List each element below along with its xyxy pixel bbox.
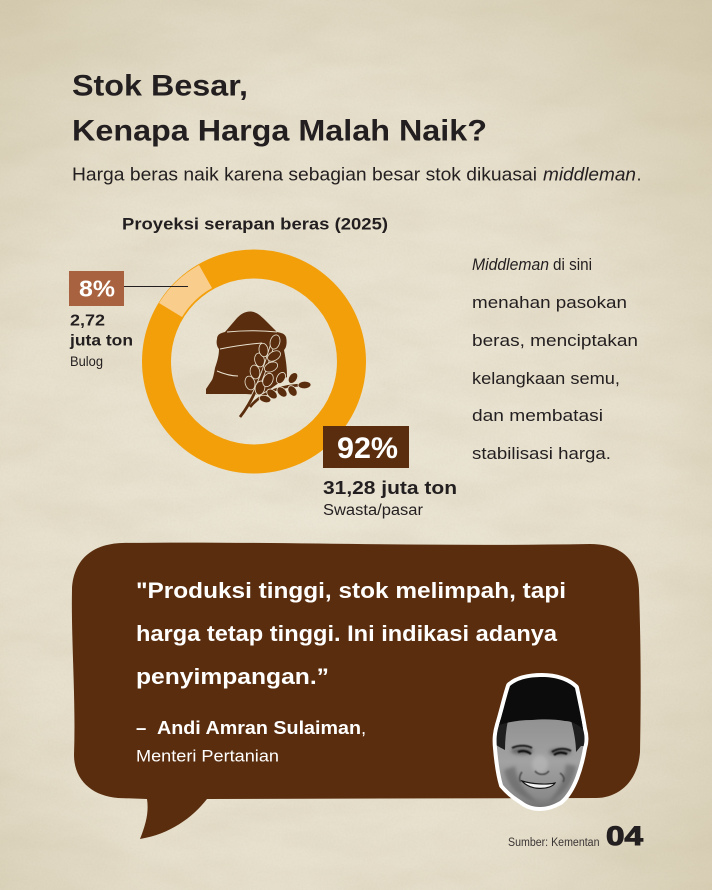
quote text: harga tetap tinggi. Ini indikasi adanya [136, 621, 558, 646]
swasta value: 31,28 juta ton [323, 478, 457, 498]
explanation text: Middleman [472, 256, 549, 274]
quote text: "Produksi tinggi, stok melimpah, tapi [136, 578, 566, 603]
callout: 8% Bulog [69, 271, 188, 369]
subtitle: Harga beras naik karena sebagian besar stok dikuasai [72, 164, 537, 184]
explanation text: kelangkaan semu, [472, 370, 620, 388]
title [72, 70, 487, 148]
callout: 8% Bulog: 8% [79, 276, 115, 302]
callout: 8% Bulog: juta ton [69, 332, 133, 350]
label box 92% [323, 426, 409, 468]
callout: 92% Swasta/pasar: Swasta/pasar [323, 502, 423, 519]
explanation text [472, 256, 638, 463]
face [496, 712, 584, 807]
attribution: – [136, 717, 146, 738]
quote text: penyimpangan.” [136, 664, 329, 689]
quote text [136, 578, 566, 689]
smile [522, 781, 555, 788]
head contents [496, 677, 584, 807]
page number: 04 [606, 821, 643, 851]
face shading [504, 748, 576, 802]
explanation text: menahan pasokan [472, 294, 627, 312]
attribution: , [361, 717, 366, 738]
white sticker outline [497, 677, 584, 807]
callout: 8% Bulog: Bulog [70, 354, 103, 369]
chart heading: Proyeksi serapan beras (2025) [122, 214, 388, 234]
speech bubble [72, 543, 641, 839]
source: Sumber: Kementan [508, 837, 600, 849]
peci hat [499, 677, 583, 729]
hair sides [495, 720, 588, 752]
attribution: Menteri Pertanian [136, 748, 279, 766]
subtitle: middleman [543, 164, 636, 184]
callout: 92% Swasta/pasar: 92% [337, 432, 398, 465]
explanation text: stabilisasi harga. [472, 445, 611, 463]
portrait: Andi Amran Sulaiman [492, 673, 588, 811]
donut chart [156, 264, 352, 459]
title: Kenapa Harga Malah Naik? [72, 114, 487, 148]
explanation text: dan membatasi [472, 407, 603, 425]
segment: Bulog 8% [159, 265, 212, 317]
callout: 92% Swasta/pasar [323, 426, 457, 519]
leader line [124, 286, 188, 288]
explanation text: di sini [553, 256, 592, 274]
Bulog value: 2,72 [70, 312, 105, 330]
label box 8% [69, 271, 124, 306]
explanation text: beras, menciptakan [472, 332, 638, 350]
icon: rice sack with wheat [206, 312, 311, 417]
attribution [136, 717, 366, 766]
nose [520, 771, 564, 782]
segment: swasta/pasar 92% [156, 264, 352, 459]
attribution: Andi Amran Sulaiman [157, 717, 361, 738]
subtitle: . [636, 164, 642, 184]
title: Stok Besar, [72, 70, 248, 102]
eyes and brows [512, 746, 571, 782]
